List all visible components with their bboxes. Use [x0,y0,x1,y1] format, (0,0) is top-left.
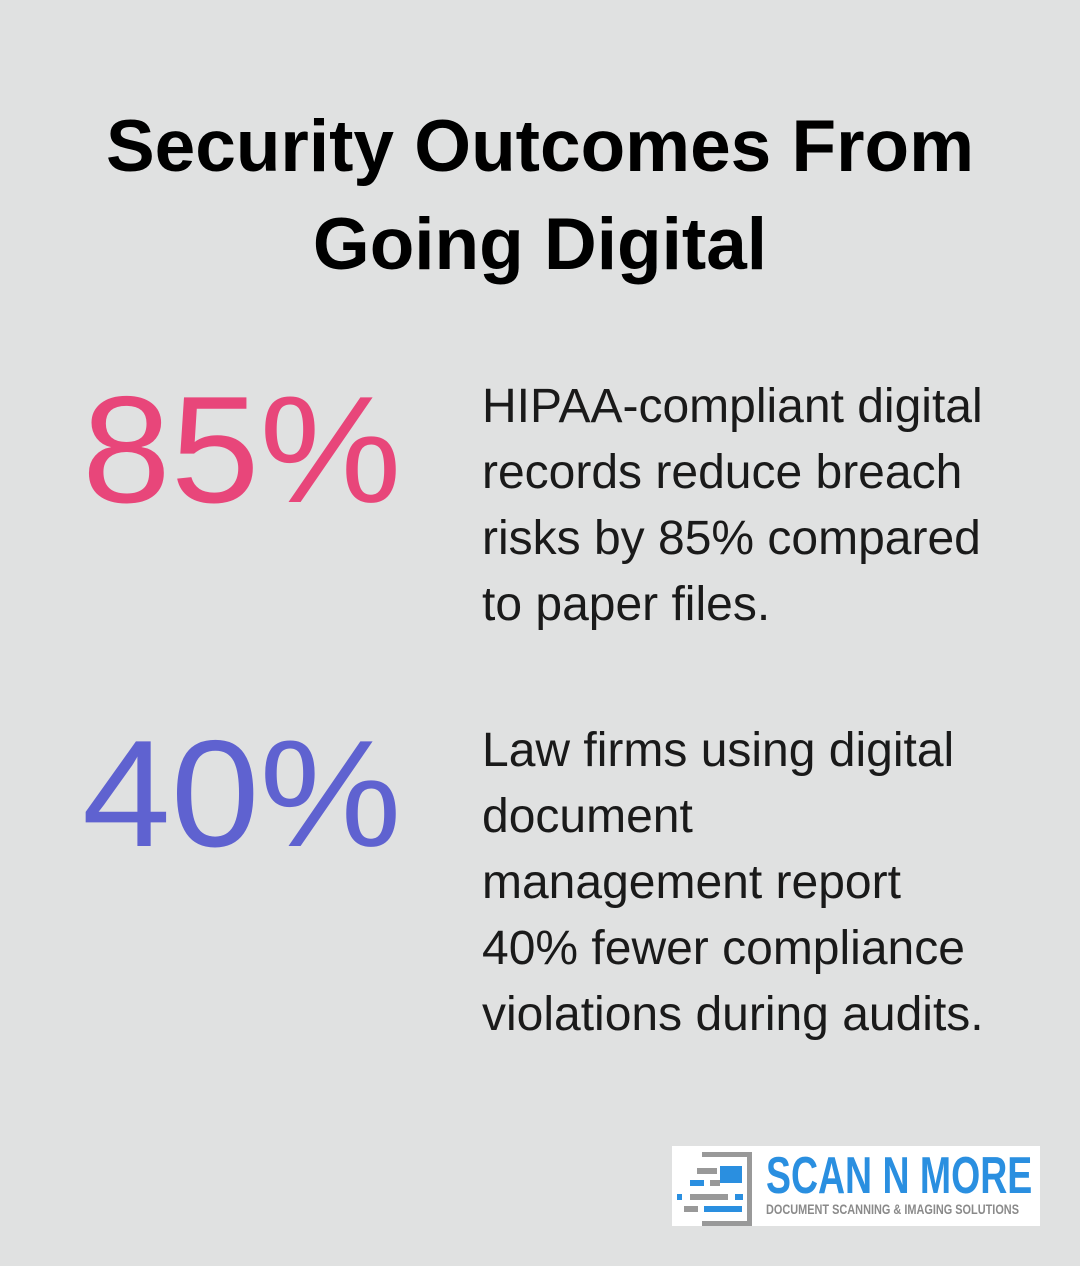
text: 85% description: risks by 85% compared [482,512,981,565]
text: 85% description: records reduce breach [482,446,962,499]
text: 40% description: violations during audits. [482,988,984,1041]
text: 40% description: document [482,790,693,843]
text: 40% description: Law firms using digital [482,724,954,777]
title: Security Outcomes From [106,106,974,187]
logo [672,1146,1040,1226]
text: 40% description: 40% fewer compliance [482,922,965,975]
stat: 85%: 85% [82,365,401,535]
stat: 40%: 40% [82,709,401,879]
title: Going Digital [313,204,767,285]
logo text: SCAN N MORE [766,1147,1032,1205]
text: 85% description: to paper files. [482,578,770,631]
text: 85% description [482,380,983,631]
text: 40% description [482,724,984,1041]
title [106,106,974,285]
text: 40% description: management report [482,856,901,909]
logo: DOCUMENT SCANNING & IMAGING SOLUTIONS [766,1201,1019,1217]
text: 85% description: HIPAA-compliant digital [482,380,983,433]
icon: scanner [677,1152,752,1226]
